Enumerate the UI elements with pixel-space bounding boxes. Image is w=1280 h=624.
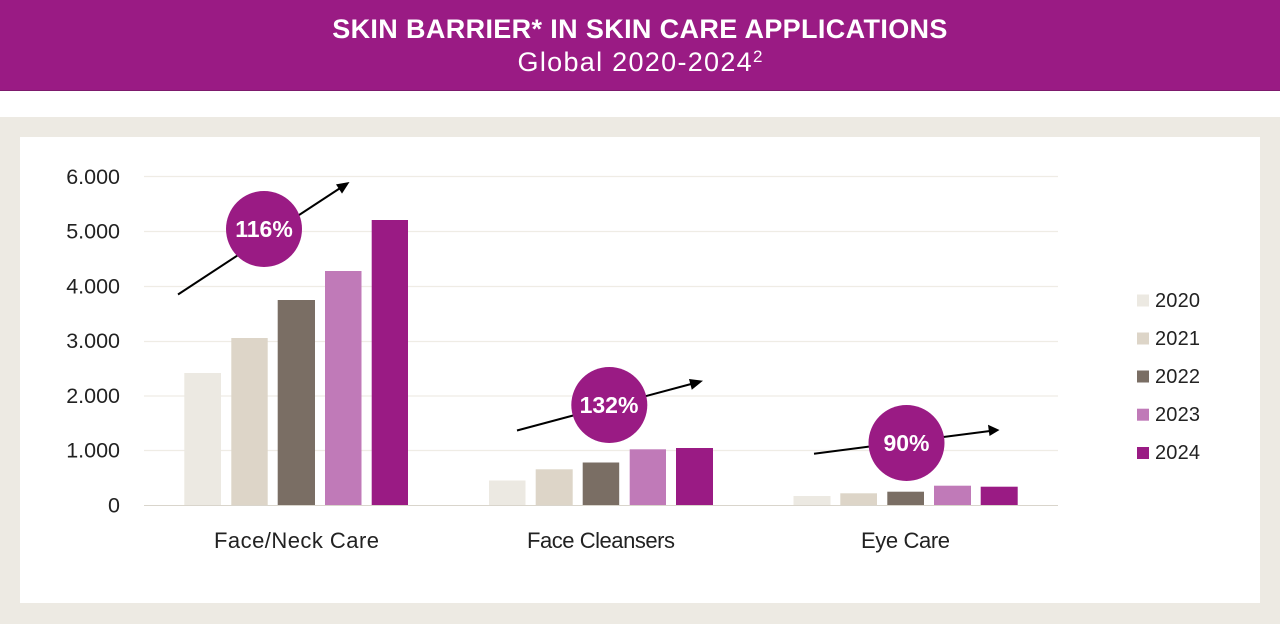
category labels bbox=[214, 528, 950, 553]
legend: 2023 bbox=[1155, 404, 1200, 426]
callout: 90%: 90% bbox=[883, 430, 930, 456]
callout: 132% bbox=[571, 367, 647, 443]
bars: Face/Neck Care bbox=[184, 220, 408, 505]
category labels: Eye Care bbox=[861, 528, 950, 553]
header banner bbox=[0, 0, 1280, 90]
callout: 116%: 116% bbox=[235, 216, 293, 242]
category labels: Face/Neck Care bbox=[214, 528, 379, 553]
callout: 132%: 132% bbox=[580, 392, 638, 418]
y axis labels: 4.000 bbox=[66, 274, 120, 298]
legend bbox=[1137, 290, 1200, 464]
panel: white chart card bbox=[20, 137, 1260, 603]
bars: Face Cleansers bbox=[489, 448, 713, 505]
title: SKIN BARRIER* IN SKIN CARE APPLICATIONS bbox=[332, 14, 948, 44]
legend: 2022 bbox=[1155, 366, 1200, 388]
subtitle: Global 2020-20242 bbox=[518, 47, 762, 77]
y axis labels: 6.000 bbox=[66, 165, 120, 189]
arrow: Face/Neck Care trend bbox=[178, 182, 350, 294]
legend: 2020 bbox=[1155, 290, 1200, 312]
arrow: Face Cleansers trend bbox=[517, 379, 703, 430]
legend: 2021 bbox=[1155, 328, 1200, 350]
legend: 2024 bbox=[1155, 442, 1200, 464]
y axis labels bbox=[66, 165, 120, 518]
y axis labels: 1.000 bbox=[66, 438, 120, 462]
y axis labels: 2.000 bbox=[66, 384, 120, 408]
callout: 90% bbox=[868, 405, 944, 481]
category labels: Face Cleansers bbox=[527, 528, 675, 553]
y axis labels: 0 bbox=[108, 494, 120, 518]
arrow: Eye Care trend bbox=[814, 425, 1000, 454]
y axis labels: 5.000 bbox=[66, 220, 120, 244]
bars: Eye Care bbox=[794, 486, 1018, 505]
y axis labels: 3.000 bbox=[66, 329, 120, 353]
callout: 116% bbox=[226, 191, 302, 267]
